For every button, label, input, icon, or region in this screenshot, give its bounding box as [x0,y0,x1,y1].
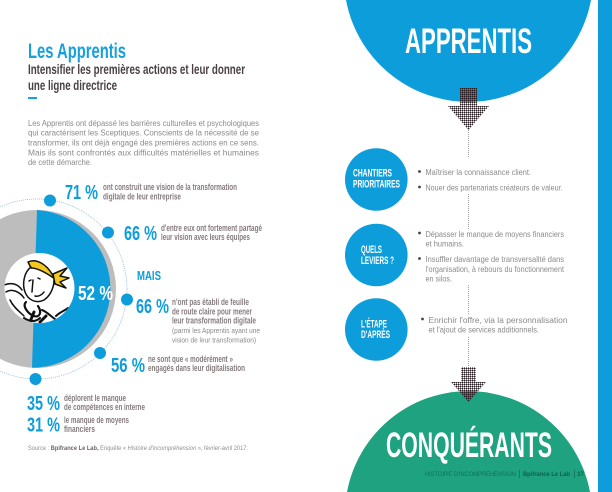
arrow: bottom dotted arrow [451,367,486,402]
footer: 37 [577,471,584,478]
top circle: APPRENTIS: APPRENTIS [405,22,532,61]
list: chantiers: Nouer des partenariats créateurs de valeur. [426,182,562,192]
pie chart 52 %: 52 % [78,283,113,305]
stat: 66 % partagé: d'entre eux ont fortement partagé [161,223,262,234]
panel: quels leviers [345,224,408,286]
ring markers [30,194,133,385]
panel: l'étape d'après: L'ÉTAPE [361,318,387,330]
list: leviers: l'organisation, à rebours du fonctionnement [426,264,565,274]
stat: 56 % [111,354,245,377]
stat: 56 %: engagés dans leur digitalisation [148,363,245,374]
list: leviers: et humains. [426,238,464,248]
stat: 66 % feuille de route: n'ont pas établi de feuille [172,297,249,308]
stat: 66 % feuille de route: de route claire pour mener [172,306,252,318]
stat: 31 %: financiers [64,424,95,435]
stat: 66 % feuille de route: vision de leur transformation) [172,336,256,344]
intro text block: de cette démarche. [28,157,92,167]
list: leviers: Dépasser le manque de moyens financiers [426,229,564,239]
intro text block: transformer, ils ont déjà engagé des premières actions en ce sens. [28,138,259,148]
heading: Les Apprentis: une ligne directrice [28,77,117,93]
stat: 56 %: 56 % [111,355,145,377]
right edge blue strip [598,0,612,492]
heading: Les Apprentis [28,40,245,99]
stat: 66 % partagé: leur vision avec leurs équipes [161,232,250,243]
list: chantiers: Maîtriser la connaissance client. [426,167,531,177]
panel: chantiers prioritaires: CHANTIERS [353,168,392,180]
stat: 35 %: 35 % [27,393,60,415]
stat: 56 %: ne sont que « modérément » [148,354,233,365]
panel: quels leviers: LEVIERS ? [361,255,394,267]
label: MAIS: MAIS [137,268,161,283]
dotted connector lines [468,130,470,367]
stat: 31 %: 31 % [27,414,60,436]
icon: apprentice character [4,261,69,322]
stat: 66 % feuille de route [136,296,260,344]
list: étape [421,315,568,334]
heading: Les Apprentis: Intensifier les premières actions et leur donner [28,61,245,77]
source note: Source : Bpifrance Le Lab, Enquête « Histoire d'incompréhension », février-avril 2017. [28,445,248,452]
stat: 71 %: ont construit une vision de la transformation [103,182,237,193]
stat: 66 % feuille de route: leur transformation digitale [172,316,256,326]
stat: 71 %: digitale de leur entreprise [103,192,181,202]
intro text block: Les Apprentis ont dépassé les barrières culturelles et psychologiques [28,118,259,128]
stat: 66 % partagé: 66 % [124,223,157,245]
footer [425,470,584,478]
heading: Les Apprentis: Les Apprentis [28,40,126,63]
arrow: top dotted arrow [448,88,489,130]
list: leviers: Insuffler davantage de transversalité dans [426,254,564,264]
stat: 35 % [27,393,145,415]
list: chantiers [418,167,562,192]
footer: HISTOIRE D'INCOMPRÉHENSION [425,471,516,478]
stat: 31 %: le manque de moyens [64,415,129,426]
list: leviers: en silos. [426,274,452,284]
stat: 71 %: 71 % [65,182,98,204]
panel: l'étape d'après [345,298,408,361]
list: leviers [418,229,565,284]
intro text block: qui caractérisent les Sceptiques. Conscients de la nécessité de se [28,128,259,138]
list: étape: et l'ajout de services additionnels. [428,324,539,334]
stat: 31 % [27,414,129,436]
stat: 66 % feuille de route: (parmi les Apprentis ayant une [172,326,260,335]
panel: quels leviers: QUELS [361,244,382,256]
stat: 71 % [65,182,237,204]
panel: chantiers prioritaires [345,148,408,211]
bottom circle: CONQUÉRANTS [347,391,590,492]
stat: 66 % feuille de route: 66 % [136,296,169,318]
footer: Bpifrance Le Lab [523,472,570,478]
intro text block: Mais ils sont confrontés aux difficultés matérielles et humaines [28,148,259,158]
top circle: APPRENTIS [346,0,591,102]
pie chart 52 % [0,199,127,379]
panel: l'étape d'après: D'APRÈS [361,328,390,341]
intro text block [28,118,259,167]
stat: 35 %: déplorent le manque [64,393,126,404]
panel: chantiers prioritaires: PRIORITAIRES [353,178,400,190]
stat: 35 %: de compétences en interne [64,402,145,413]
stat: 66 % partagé [124,223,262,245]
list: étape: Enrichir l'offre, via la personnalisation [428,315,568,325]
